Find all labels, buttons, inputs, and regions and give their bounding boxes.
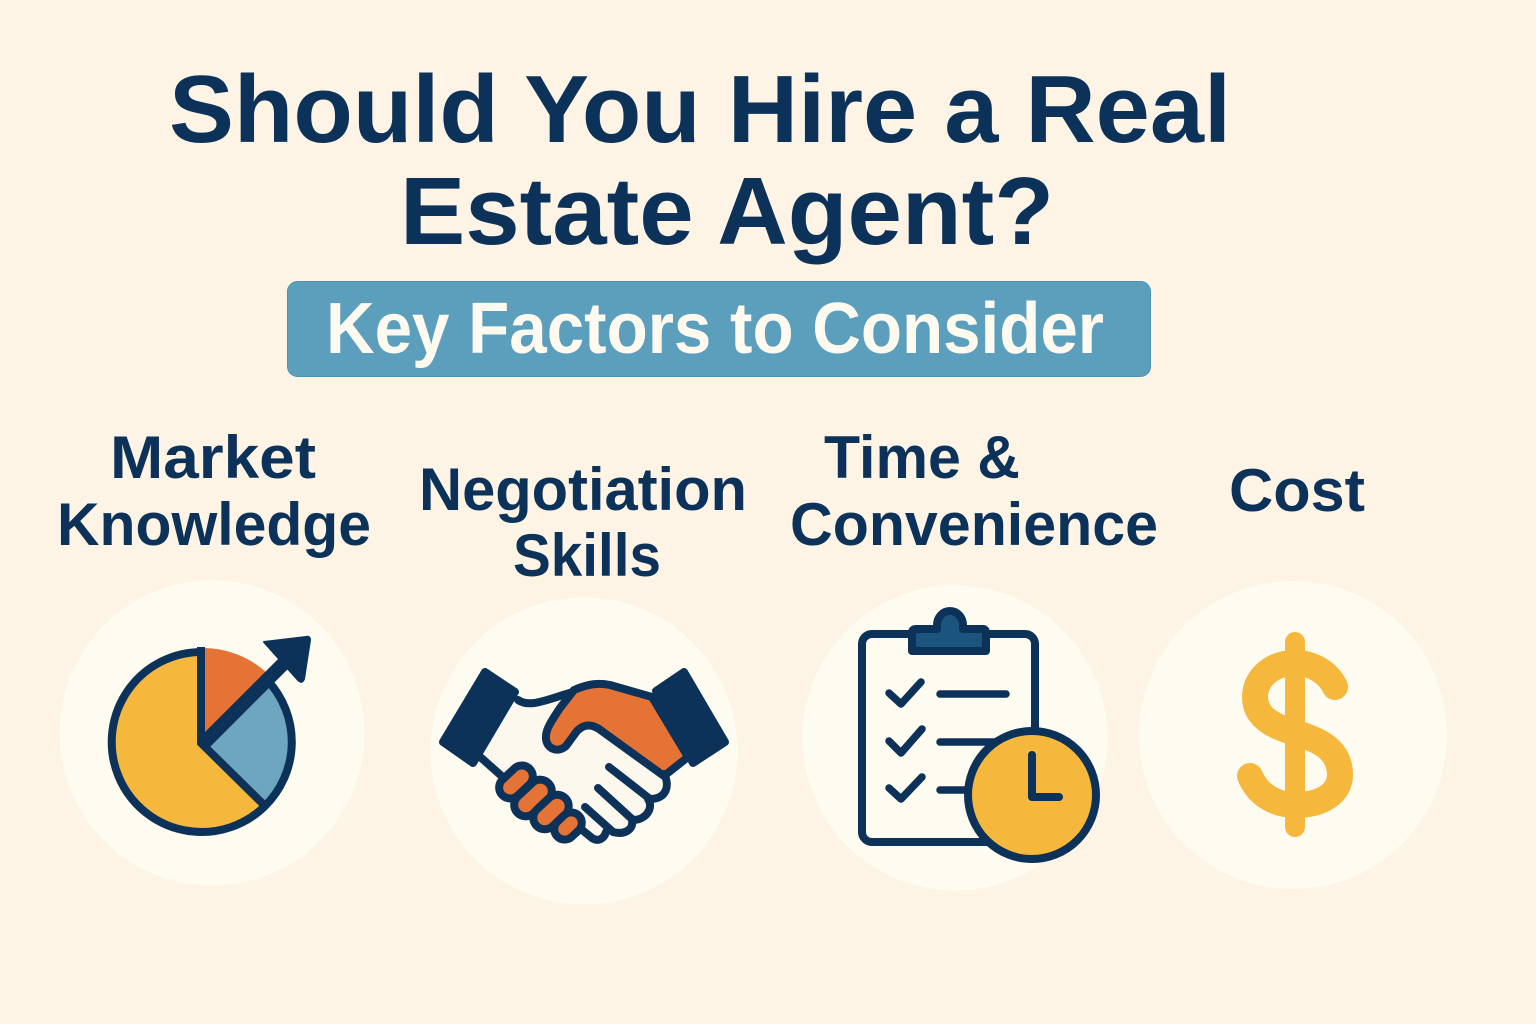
- label: market knowledge: [57, 424, 371, 558]
- factor: time and convenience: [790, 424, 1158, 890]
- label: cost: Cost: [1229, 457, 1365, 524]
- icon: handshake: [443, 672, 725, 844]
- left cuff: [443, 672, 515, 763]
- factor: negotiation skills: [419, 456, 747, 904]
- icon: checklist and clock: [862, 611, 1096, 859]
- icon circle: time and convenience: [802, 586, 1108, 890]
- label: negotiation skills: Skills: [513, 522, 661, 589]
- label: negotiation skills: Negotiation: [419, 456, 747, 523]
- icon circle: negotiation skills: [430, 598, 738, 904]
- white hands: [478, 693, 686, 840]
- label: time and convenience: [790, 424, 1158, 558]
- gripping fingers: [495, 761, 586, 844]
- right cuff: [656, 672, 725, 763]
- icon: dollar sign: [1250, 642, 1340, 827]
- title: [169, 56, 1231, 265]
- title: Should You Hire a Real: [169, 56, 1231, 163]
- label: time and convenience: Time &: [824, 424, 1020, 491]
- factor: cost: [1139, 457, 1447, 889]
- orange hand: [546, 684, 688, 776]
- icon: pie chart with arrow: [112, 637, 310, 832]
- finger lines: [581, 767, 667, 840]
- title: Estate Agent?: [400, 158, 1054, 265]
- upper wrist line: [518, 692, 573, 703]
- label: market knowledge: Knowledge: [57, 491, 371, 558]
- left arm: [478, 755, 505, 779]
- label: time and convenience: Convenience: [790, 491, 1158, 558]
- subtitle banner: Key Factors to Consider: [326, 289, 1104, 369]
- icon circle: cost: [1139, 581, 1447, 889]
- label: negotiation skills: [419, 456, 747, 589]
- icon circle: market knowledge: [60, 580, 364, 886]
- label: market knowledge: Market: [110, 424, 316, 491]
- factor: market knowledge: [57, 424, 371, 886]
